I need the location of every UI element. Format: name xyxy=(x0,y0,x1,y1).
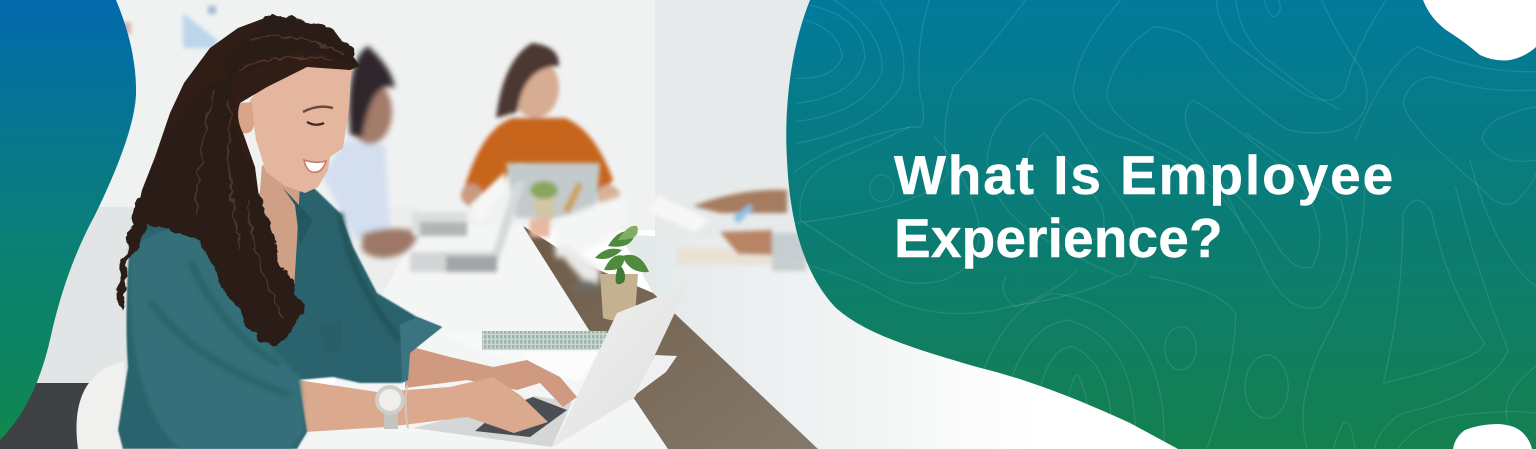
keyboard xyxy=(475,397,567,437)
back wall xyxy=(0,0,655,230)
cabinet xyxy=(30,207,160,383)
sleeve highlight xyxy=(130,230,305,449)
right table xyxy=(620,235,1034,449)
notebook under lid xyxy=(635,355,677,395)
blurred man xyxy=(322,46,418,258)
collar xyxy=(283,188,313,245)
floor xyxy=(0,383,110,449)
face xyxy=(250,55,352,193)
white blob: bottom right xyxy=(1453,424,1532,449)
lower forearm and hand xyxy=(298,377,548,433)
upper forearm xyxy=(405,345,577,407)
contour lines xyxy=(786,0,1536,449)
smile xyxy=(304,160,326,172)
title: What Is Employee xyxy=(894,144,1395,206)
curly hair edge xyxy=(117,14,358,348)
laptop lid xyxy=(553,285,688,447)
blurred far colleagues xyxy=(650,190,806,271)
woman xyxy=(117,14,577,449)
blurred woman in orange xyxy=(461,43,620,207)
papers on table xyxy=(440,331,608,382)
neck and chest xyxy=(258,165,300,290)
front laptop xyxy=(413,285,688,447)
rolled cuff xyxy=(400,317,442,383)
title: Experience? xyxy=(894,207,1223,269)
left table xyxy=(298,225,668,449)
chair xyxy=(76,361,128,449)
eyebrow and eye xyxy=(303,107,333,112)
blurred centre clutter xyxy=(552,195,628,294)
hair highlights xyxy=(195,37,345,320)
blob: left xyxy=(0,0,136,440)
blurred back laptops xyxy=(410,163,600,272)
shirt body xyxy=(118,187,442,449)
title xyxy=(894,144,1395,269)
watch xyxy=(375,385,408,429)
ear xyxy=(238,102,254,133)
sleeve fold shadows xyxy=(150,260,290,395)
plant xyxy=(595,226,649,321)
whiteboard sticker xyxy=(123,6,217,48)
shirt pocket xyxy=(318,320,342,355)
white blob: top right xyxy=(1423,0,1536,60)
laptop base xyxy=(413,396,572,447)
blob: right xyxy=(786,0,1536,449)
hair base xyxy=(136,15,360,346)
wood strip xyxy=(523,226,818,449)
